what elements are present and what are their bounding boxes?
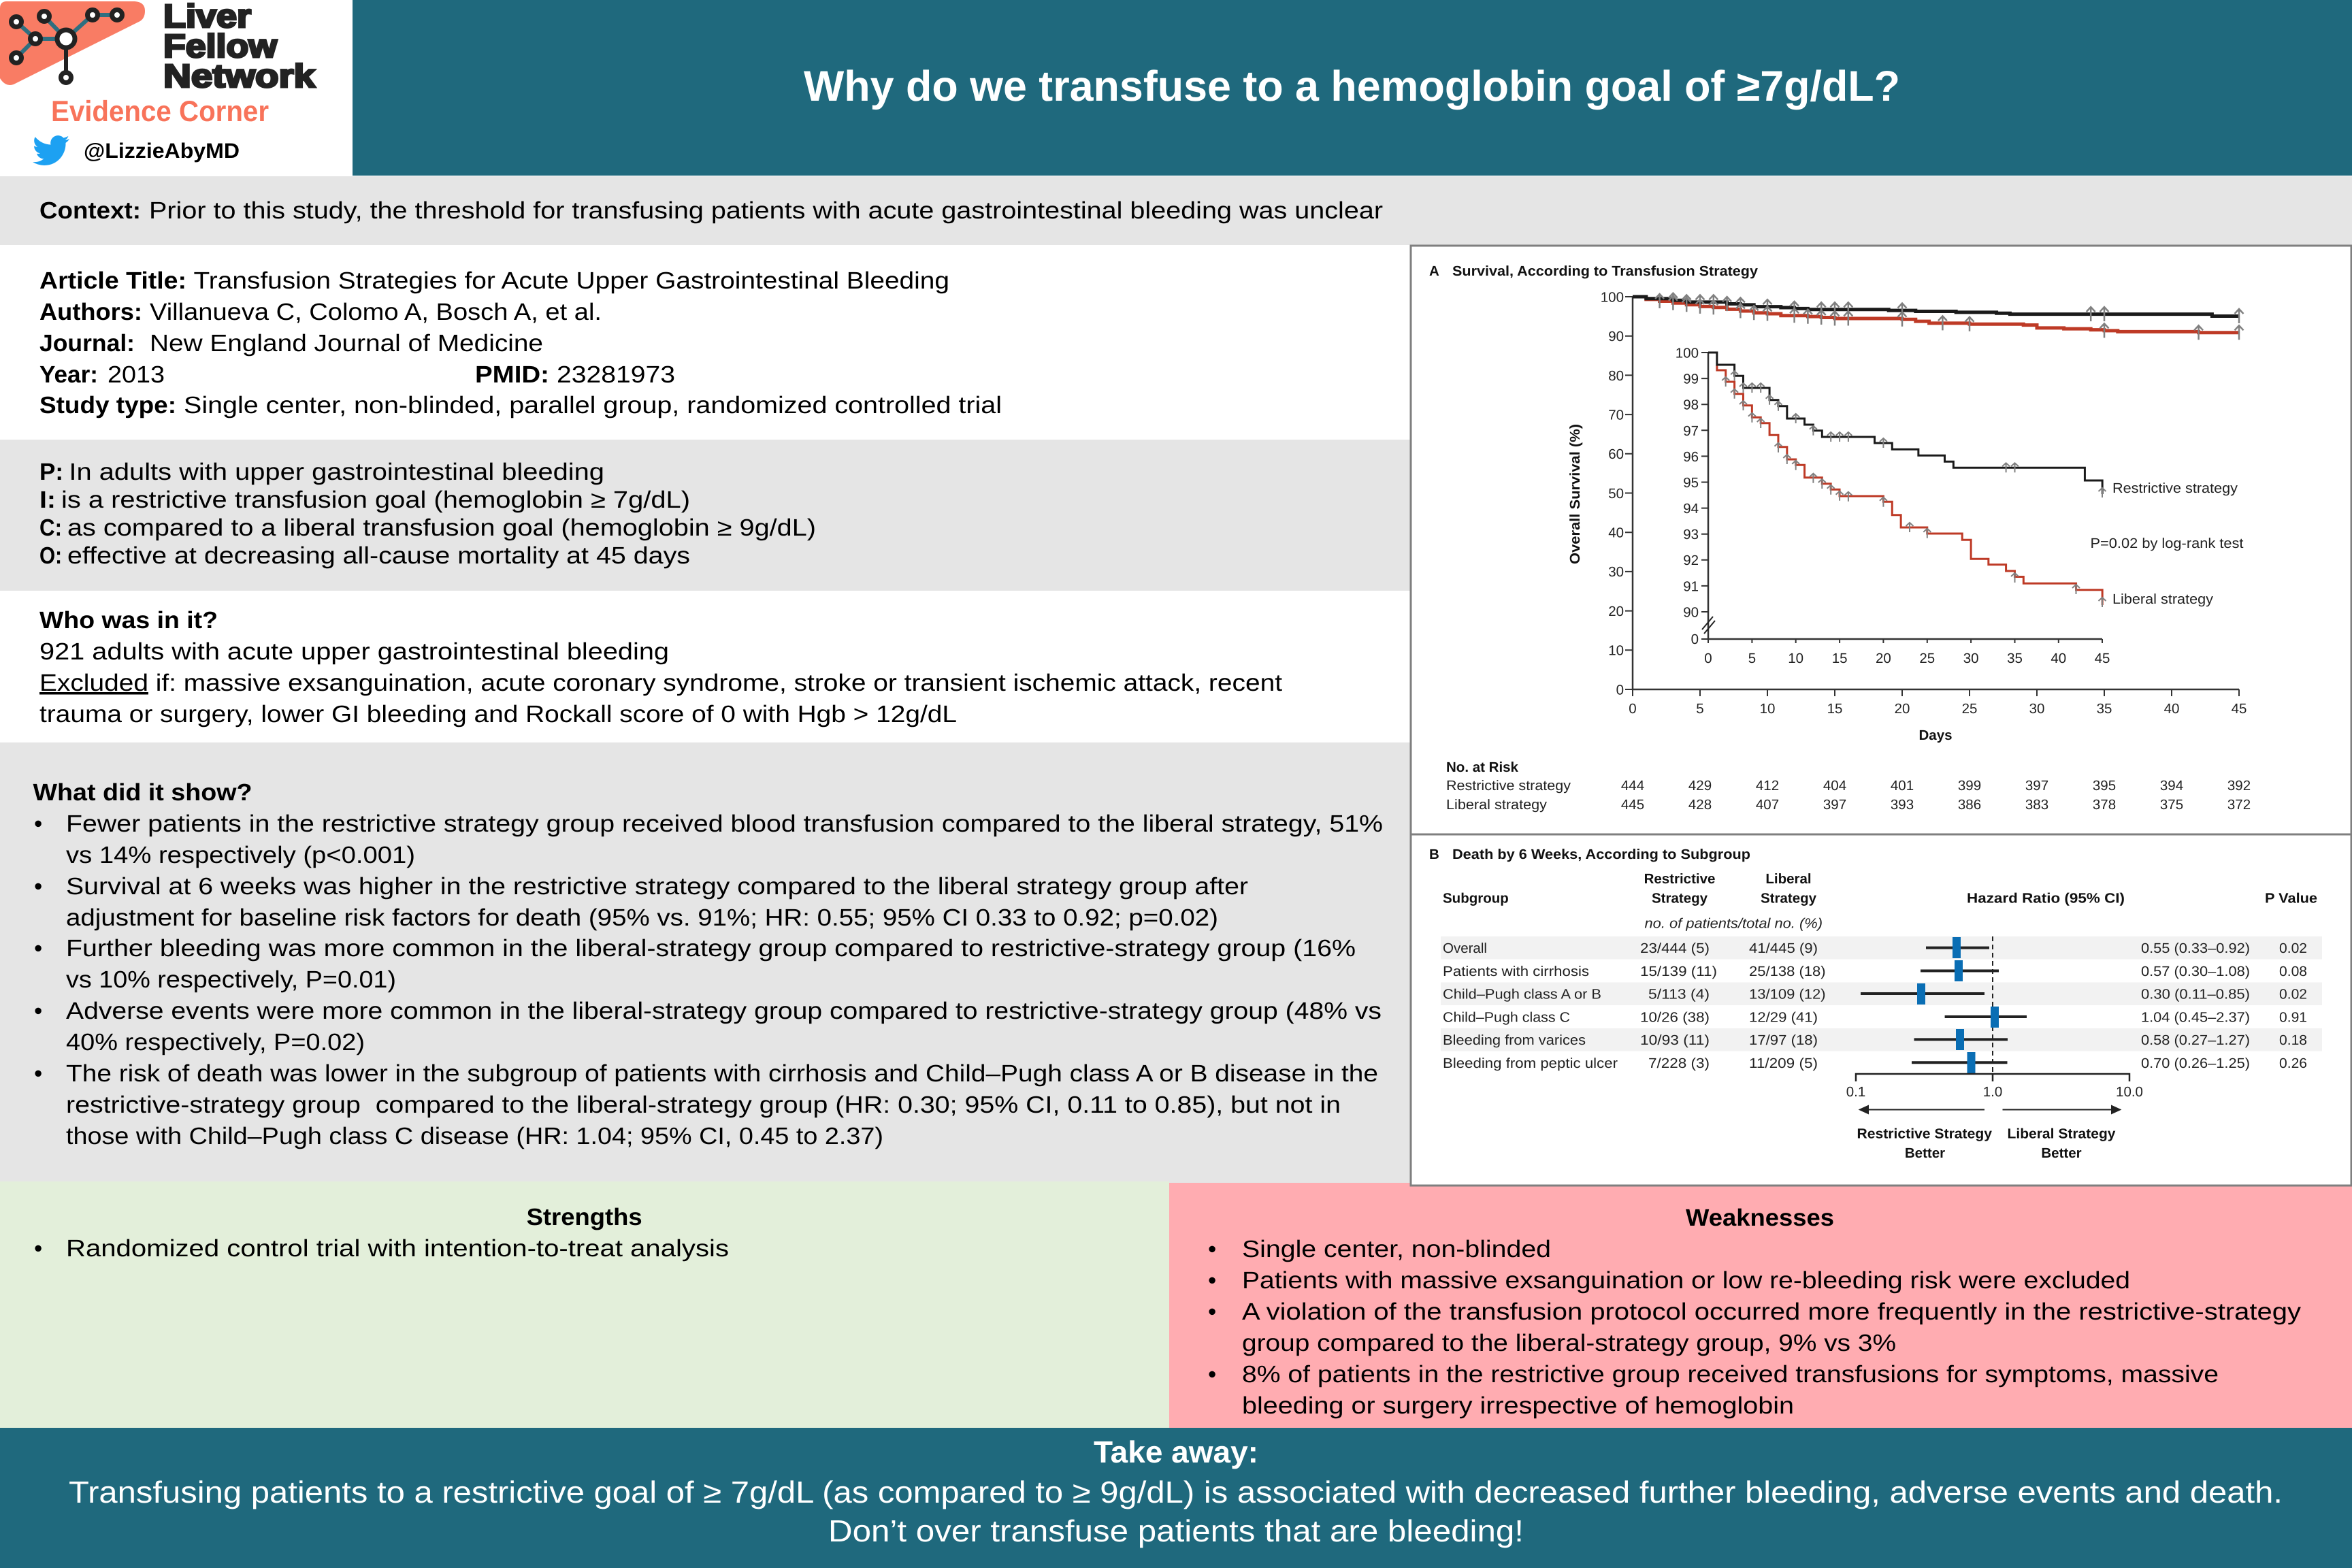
panel: article details: 2013 xyxy=(108,361,165,388)
number at risk table: 444 xyxy=(1621,778,1644,794)
panel: context xyxy=(0,176,2352,245)
panel: weaknesses: • xyxy=(1208,1236,1216,1262)
panel: who was in it: trauma or surgery, lower GI bleeding and Rockall score of 0 with Hgb > 12g/dL xyxy=(39,701,957,728)
panel: weaknesses: A violation of the transfusion protocol occurred more frequently in the restrictive-strategy xyxy=(1242,1298,2302,1325)
panel: article details: Article Title: xyxy=(39,267,186,294)
row: overall: 23/444 (5) xyxy=(1640,941,1710,956)
panel: PICO: C: xyxy=(39,514,62,541)
main axes: 70 xyxy=(1608,407,1624,423)
panel: article details: PMID: xyxy=(475,361,549,388)
main axes: 50 xyxy=(1608,486,1624,502)
panel: take away: Don’t over transfuse patients that are bleeding! xyxy=(828,1514,1524,1548)
row: child-pugh C: 1.04 (0.45–2.37) xyxy=(2141,1010,2250,1025)
inset axes: 10 xyxy=(1788,651,1803,666)
panel: PICO xyxy=(0,440,1410,591)
forest axis: 1.0 xyxy=(1983,1084,2002,1100)
panel: who was in it: Excluded if: massive exsanguination, acute coronary syndrome, stroke or transient ischemic attack, recent xyxy=(39,670,1282,696)
results bullets: adjustment for baseline risk factors for death (95% vs. 91%; HR: 0.55; 95% CI 0.33 to 0.92; p=0.02) xyxy=(66,904,1218,931)
inset axes: 90 xyxy=(1683,604,1699,621)
direction labels: Better xyxy=(2041,1145,2082,1161)
inset axes: 100 xyxy=(1676,346,1699,361)
row: cirrhosis: 25/138 (18) xyxy=(1749,964,1826,979)
number at risk table: 401 xyxy=(1891,778,1914,794)
inset axes: 91 xyxy=(1683,578,1699,595)
curve labels: P=0.02 by log-rank test xyxy=(2091,536,2244,551)
panel: article details: 23281973 xyxy=(557,361,675,388)
panel: strengths: • xyxy=(34,1235,42,1262)
main curves xyxy=(1633,293,2243,340)
forest axis: 0.1 xyxy=(1846,1084,1865,1100)
panel: weaknesses xyxy=(1169,1183,2352,1428)
results bullets: Survival at 6 weeks was higher in the restrictive strategy compared to the liberal strategy group after xyxy=(66,873,1248,900)
number at risk table: 394 xyxy=(2160,778,2183,794)
main axes: 40 xyxy=(2164,701,2179,717)
number at risk table: 395 xyxy=(2093,778,2116,794)
main axes: 10 xyxy=(1608,642,1624,659)
number at risk table: 399 xyxy=(1958,778,1981,794)
inset curve: liberal strategy xyxy=(1717,365,2102,605)
row: varices: 0.58 (0.27–1.27) xyxy=(2141,1032,2250,1048)
results bullets: those with Child–Pugh class C disease (HR: 1.04; 95% CI, 0.45 to 2.37) xyxy=(66,1123,883,1149)
number at risk table: 428 xyxy=(1688,797,1712,813)
inset axes: 95 xyxy=(1683,475,1699,491)
inset axes: 99 xyxy=(1683,372,1699,387)
arrow: restrictive better xyxy=(1860,1106,1984,1113)
main axes: 45 xyxy=(2232,701,2247,717)
inset axes: 0 xyxy=(1704,651,1712,666)
panel: strengths: Strengths xyxy=(527,1204,642,1230)
evidence corner label: Evidence Corner xyxy=(51,95,269,128)
panel: PICO: I: xyxy=(39,487,56,513)
number at risk table: 392 xyxy=(2227,778,2251,794)
row: child-pugh A or B xyxy=(1443,987,2307,1002)
panel: article details xyxy=(39,267,1002,419)
icon: liver network xyxy=(0,1,145,85)
panel: who was in it: 921 adults with acute upper gastrointestinal bleeding xyxy=(39,638,669,665)
row: child-pugh A or B: 0.02 xyxy=(2279,987,2307,1002)
inset axes: 0 xyxy=(1691,632,1699,647)
row: cirrhosis: Patients with cirrhosis xyxy=(1443,964,1589,979)
panel: article details: Journal: xyxy=(39,330,135,357)
panel: strengths: Randomized control trial with intention-to-treat analysis xyxy=(66,1235,729,1262)
inset axes: 92 xyxy=(1683,553,1699,568)
panel: article details: Single center, non-blinded, parallel group, randomized controlled trial xyxy=(184,392,1002,419)
chart title A: A xyxy=(1429,263,1439,279)
row: child-pugh C: 0.91 xyxy=(2279,1010,2307,1025)
main axes: 30 xyxy=(2029,701,2044,717)
panel: PICO: as compared to a liberal transfusion goal (hemoglobin ≥ 9g/dL) xyxy=(67,514,816,541)
main axes: 0 xyxy=(1629,701,1637,717)
panel: PICO: is a restrictive transfusion goal (hemoglobin ≥ 7g/dL) xyxy=(61,487,690,513)
confidence intervals xyxy=(1861,948,2027,1062)
main axes: 100 xyxy=(1601,290,1624,305)
number at risk table: 372 xyxy=(2227,797,2251,813)
inset axes: 93 xyxy=(1683,527,1699,542)
number at risk table: 397 xyxy=(1823,797,1846,813)
results bullets: vs 14% respectively (p<0.001) xyxy=(66,842,415,868)
panel: weaknesses: Weaknesses xyxy=(1686,1205,1834,1231)
direction labels: Liberal Strategy xyxy=(2008,1126,2116,1142)
column headers: Strategy xyxy=(1652,890,1708,906)
main axes: 35 xyxy=(2097,701,2112,717)
inset axes: 20 xyxy=(1876,651,1891,666)
row: varices: Bleeding from varices xyxy=(1443,1032,1586,1048)
panel: take away: Take away: xyxy=(1094,1435,1258,1469)
inset axes: 35 xyxy=(2007,651,2023,666)
number at risk table: Restrictive strategy xyxy=(1446,778,1571,794)
row: peptic ulcer: 0.26 xyxy=(2279,1056,2307,1071)
panel: weaknesses: group compared to the liberal-strategy group, 9% vs 3% xyxy=(1242,1330,1896,1356)
row: cirrhosis xyxy=(1443,964,2307,979)
panel: PICO: effective at decreasing all-cause mortality at 45 days xyxy=(67,542,690,569)
number at risk table: 397 xyxy=(2025,778,2048,794)
direction labels: Better xyxy=(1905,1145,1945,1161)
row: varices xyxy=(1443,1032,2307,1048)
row: peptic ulcer: Bleeding from peptic ulcer xyxy=(1443,1056,1618,1071)
column headers xyxy=(1443,871,2317,932)
results bullets: • xyxy=(34,811,42,837)
inset axes: 30 xyxy=(1963,651,1979,666)
main axes: 80 xyxy=(1608,368,1624,384)
column headers: Hazard Ratio (95% CI) xyxy=(1967,890,2125,906)
arrow: liberal better xyxy=(2002,1106,2120,1113)
row: peptic ulcer: 7/228 (3) xyxy=(1648,1056,1710,1071)
column headers: Restrictive xyxy=(1644,871,1715,887)
inset axes: 45 xyxy=(2095,651,2110,666)
inset axes: 15 xyxy=(1832,651,1848,666)
column headers: Liberal xyxy=(1765,871,1812,887)
row: cirrhosis: 0.08 xyxy=(2279,964,2307,979)
panel: context: Prior to this study, the threshold for transfusing patients with acute gastrointestinal bleeding was unclear xyxy=(149,197,1383,224)
row: child-pugh A or B: 13/109 (12) xyxy=(1749,987,1826,1002)
number at risk table: 386 xyxy=(1958,797,1981,813)
row: peptic ulcer: 0.70 (0.26–1.25) xyxy=(2141,1056,2250,1071)
inset censor marks xyxy=(1722,371,2106,607)
panel: weaknesses: Single center, non-blinded xyxy=(1242,1236,1551,1262)
panel: article details: New England Journal of Medicine xyxy=(150,330,543,357)
panel: context: Context: xyxy=(39,197,141,224)
results bullets: • xyxy=(34,873,42,900)
number at risk table: 393 xyxy=(1891,797,1914,813)
main axes: 10 xyxy=(1760,701,1775,717)
row stripes xyxy=(1441,936,2322,1051)
twitter handle: @LizzieAbyMD xyxy=(84,139,240,163)
panel: article details: Study type: xyxy=(39,392,176,419)
logo wordmark: Fellow xyxy=(163,29,278,65)
number at risk table: 383 xyxy=(2025,797,2048,813)
forest axis xyxy=(1846,1074,2143,1100)
main axes: 5 xyxy=(1696,701,1704,717)
inset curve: restrictive strategy xyxy=(1708,353,2102,494)
main axes: 90 xyxy=(1608,329,1624,344)
main axes: 15 xyxy=(1827,701,1842,717)
inset axes: 5 xyxy=(1748,651,1756,666)
panel: weaknesses: • xyxy=(1208,1298,1216,1325)
main axes: 0 xyxy=(1616,682,1624,698)
direction labels: Restrictive Strategy xyxy=(1857,1126,1993,1142)
results bullets: vs 10% respectively, P=0.01) xyxy=(66,966,396,993)
results bullets: restrictive-strategy group compared to the liberal-strategy group (HR: 0.30; 95% CI, 0.11 to 0.85), but not in xyxy=(66,1092,1341,1118)
inset axes: 98 xyxy=(1683,397,1699,412)
results bullets: The risk of death was lower in the subgroup of patients with cirrhosis and Child–Pugh class A or B disease in the xyxy=(66,1060,1378,1087)
panel: weaknesses: 8% of patients in the restrictive group received transfusions for symptoms, massive xyxy=(1242,1361,2219,1388)
row: overall: 0.55 (0.33–0.92) xyxy=(2141,941,2250,956)
number at risk table: 378 xyxy=(2093,797,2116,813)
row: child-pugh C: 10/26 (38) xyxy=(1640,1010,1710,1025)
row: varices: 17/97 (18) xyxy=(1749,1032,1818,1048)
number at risk table xyxy=(1446,760,2251,813)
title banner: Why do we transfuse to a hemoglobin goal of ≥7g/dL? xyxy=(804,63,1900,110)
main axes: 30 xyxy=(1608,564,1624,580)
results bullets: Fewer patients in the restrictive strategy group received blood transfusion compared to the liberal strategy, 51% xyxy=(66,811,1383,837)
column headers: Subgroup xyxy=(1443,890,1509,906)
icon: twitter bird xyxy=(33,135,69,165)
panel: PICO: In adults with upper gastrointestinal bleeding xyxy=(69,459,604,485)
row: child-pugh C xyxy=(1443,1010,2307,1025)
column headers: no. of patients/total no. (%) xyxy=(1644,916,1823,932)
number at risk table: 375 xyxy=(2160,797,2183,813)
panel: strengths xyxy=(0,1181,1169,1428)
row: child-pugh A or B: Child–Pugh class A or B xyxy=(1443,987,1601,1002)
chart title B: Death by 6 Weeks, According to Subgroup xyxy=(1452,847,1750,862)
logo wordmark: Network xyxy=(163,59,315,95)
main axes: 40 xyxy=(1608,525,1624,540)
row: overall: Overall xyxy=(1443,941,1487,956)
row: child-pugh C: 12/29 (41) xyxy=(1749,1010,1818,1025)
panel: PICO: P: xyxy=(39,459,63,485)
panel: weaknesses: bleeding or surgery irrespective of hemoglobin xyxy=(1242,1392,1794,1419)
panel: who was in it xyxy=(39,607,1282,728)
panel: article details: Year: xyxy=(39,361,98,388)
inset axes: 25 xyxy=(1919,651,1935,666)
row: overall xyxy=(1443,941,2307,956)
panel: weaknesses: • xyxy=(1208,1361,1216,1388)
inset axes: 40 xyxy=(2051,651,2066,666)
panel: article details: Villanueva C, Colomo A, Bosch A, et al. xyxy=(150,299,602,325)
chart: forest plot by subgroup xyxy=(1429,847,2322,1161)
panel: take away xyxy=(0,1428,2352,1568)
panel: article details: Transfusion Strategies for Acute Upper Gastrointestinal Bleeding xyxy=(193,267,949,294)
panel: take away: Transfusing patients to a restrictive goal of ≥ 7g/dL (as compared to ≥ 9g/dL) is associated with decreased further bleeding, adverse events and death. xyxy=(69,1475,2283,1509)
logo wordmark xyxy=(163,0,315,95)
results bullets: • xyxy=(34,998,42,1024)
results bullets xyxy=(34,811,1383,1149)
number at risk table: Liberal strategy xyxy=(1446,797,1548,813)
panel: article details: Authors: xyxy=(39,299,142,325)
panel: figure frame xyxy=(1411,246,2351,1186)
row: overall: 0.02 xyxy=(2279,941,2307,956)
panel: who was in it: Who was in it? xyxy=(39,607,218,634)
chart: survival Kaplan-Meier xyxy=(1429,263,2251,813)
column headers: P Value xyxy=(2265,890,2317,906)
inset axes: 96 xyxy=(1683,449,1699,465)
main axes xyxy=(1601,290,2247,717)
results bullets: 40% respectively, P=0.02) xyxy=(66,1029,365,1056)
row: child-pugh A or B: 0.30 (0.11–0.85) xyxy=(2141,987,2250,1002)
main axes: 25 xyxy=(1962,701,1977,717)
row: varices: 0.18 xyxy=(2279,1032,2307,1048)
title banner xyxy=(353,0,2352,176)
table rows xyxy=(1443,941,2307,1071)
column headers: Strategy xyxy=(1761,890,1817,906)
hazard ratio markers xyxy=(1917,937,1999,1073)
row: varices: 10/93 (11) xyxy=(1640,1032,1710,1048)
main axes: 20 xyxy=(1895,701,1910,717)
panel: what did it show xyxy=(0,742,1410,1183)
inset axes: 94 xyxy=(1683,501,1699,517)
chart title A: Survival, According to Transfusion Strategy xyxy=(1452,263,1759,279)
row: cirrhosis: 15/139 (11) xyxy=(1640,964,1717,979)
number at risk table: 404 xyxy=(1823,778,1846,794)
row: peptic ulcer: 11/209 (5) xyxy=(1749,1056,1818,1071)
direction labels xyxy=(1857,1126,2116,1161)
panel: weaknesses: Patients with massive exsanguination or low re-bleeding risk were excluded xyxy=(1242,1267,2130,1294)
row: overall: 41/445 (9) xyxy=(1749,941,1818,956)
number at risk table: 445 xyxy=(1621,797,1644,813)
main axes: 20 xyxy=(1608,604,1624,619)
row: cirrhosis: 0.57 (0.30–1.08) xyxy=(2141,964,2250,979)
inset axes: 97 xyxy=(1683,423,1699,439)
results bullets: Adverse events were more common in the liberal-strategy group compared to restrictive-strategy group (48% vs xyxy=(66,998,1382,1024)
main axes: 60 xyxy=(1608,446,1624,462)
panel: PICO: O: xyxy=(39,542,62,569)
results bullets: • xyxy=(34,1060,42,1087)
results bullets: Further bleeding was more common in the liberal-strategy group compared to restrictive-strategy group (16% xyxy=(66,935,1356,962)
number at risk table: 429 xyxy=(1688,778,1712,794)
forest reference line xyxy=(1992,936,1993,1074)
chart title B: B xyxy=(1429,847,1439,862)
y axis title: Overall Survival (%) xyxy=(1567,424,1583,564)
curve labels xyxy=(2091,480,2244,607)
heading: results: What did it show? xyxy=(33,779,252,806)
row: peptic ulcer xyxy=(1443,1056,2307,1071)
number at risk table: No. at Risk xyxy=(1446,760,1519,775)
x axis title: Days xyxy=(1918,728,1953,743)
inset chart xyxy=(1676,346,2244,666)
row: child-pugh C: Child–Pugh class C xyxy=(1443,1010,1570,1025)
panel: weaknesses: • xyxy=(1208,1267,1216,1294)
row: child-pugh A or B: 5/113 (4) xyxy=(1648,987,1710,1002)
results bullets: • xyxy=(34,935,42,962)
number at risk table: 412 xyxy=(1756,778,1779,794)
curve labels: Liberal strategy xyxy=(2112,591,2214,607)
number at risk table: 407 xyxy=(1756,797,1779,813)
forest axis: 10.0 xyxy=(2116,1084,2143,1100)
curve labels: Restrictive strategy xyxy=(2112,480,2238,496)
inset axes xyxy=(1676,346,2110,666)
logo block xyxy=(0,0,315,165)
